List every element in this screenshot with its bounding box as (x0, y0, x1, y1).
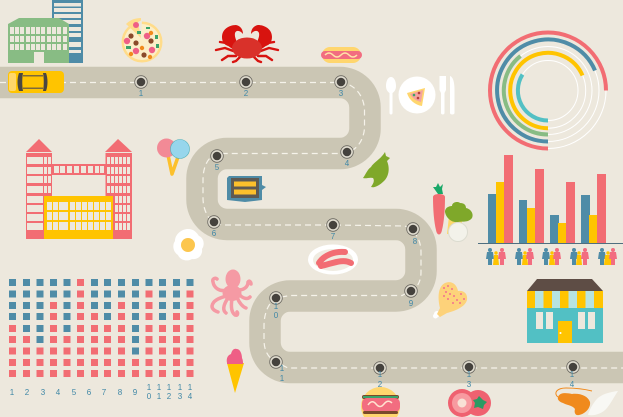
icon: burger (361, 387, 400, 417)
route stop numbers (139, 89, 575, 389)
icon: sausage plate (308, 244, 358, 274)
radial bar chart (490, 32, 606, 148)
icon: octopus (212, 270, 251, 315)
icon: pizza (122, 18, 162, 62)
icon: toaster (227, 176, 266, 202)
waffle chart: column numbers: 0 (147, 392, 152, 401)
route stop numbers: 1 (570, 370, 575, 379)
icon: pea pod (363, 152, 390, 187)
waffle chart: column numbers: 1 (147, 383, 152, 392)
route stop numbers: 9 (409, 299, 414, 308)
route stop numbers: 1 (274, 302, 279, 311)
icon: blue tower (52, 0, 83, 63)
waffle chart: column numbers: 1 (157, 383, 162, 392)
route stop numbers: 4 (345, 159, 350, 168)
icon: shop front (527, 279, 603, 343)
waffle chart: column numbers: 3 (41, 388, 46, 397)
waffle chart: column numbers: 4 (56, 388, 61, 397)
icon: vegetables group (445, 202, 473, 242)
road (0, 82, 623, 368)
icon: green building (8, 18, 69, 63)
waffle chart: column numbers: 2 (167, 392, 172, 401)
route stop numbers: 3 (467, 380, 472, 389)
waffle chart: column numbers: 8 (118, 388, 123, 397)
icon: red crab (216, 25, 278, 62)
icon: hot dog (321, 47, 362, 63)
waffle chart: column numbers: 7 (102, 388, 107, 397)
route stop numbers: 4 (570, 380, 575, 389)
waffle chart: column numbers: 3 (178, 392, 183, 401)
route stop numbers: 1 (280, 364, 285, 373)
route stop numbers: 0 (274, 311, 279, 320)
route stop numbers: 1 (139, 89, 144, 98)
icon row: families (486, 248, 617, 265)
route stop numbers: 2 (244, 89, 249, 98)
waffle chart: column numbers: 1 (167, 383, 172, 392)
waffle chart: column numbers: 9 (133, 388, 138, 397)
waffle chart: column numbers: 5 (72, 388, 77, 397)
route stop numbers: 1 (378, 370, 383, 379)
icon: seashell (588, 391, 618, 415)
route stop numbers: 3 (339, 89, 344, 98)
waffle chart: column numbers: 1 (10, 388, 15, 397)
icon: ice cream cone (227, 349, 244, 393)
icon: carrot (433, 183, 445, 234)
icon: fried egg (173, 229, 204, 260)
waffle chart: column numbers: 2 (25, 388, 30, 397)
route stop numbers: 5 (215, 163, 220, 172)
route stop numbers: 7 (331, 232, 336, 241)
bar chart (478, 155, 623, 244)
icon: chicken drumstick (433, 282, 467, 318)
icon: yellow taxi (8, 71, 64, 93)
waffle chart: column numbers: 4 (188, 392, 193, 401)
waffle chart: column numbers: 6 (87, 388, 92, 397)
waffle chart: column numbers (10, 383, 193, 401)
icon: tomato slices (448, 389, 491, 417)
waffle chart: column numbers: 1 (188, 383, 193, 392)
waffle chart: column numbers: 1 (157, 392, 162, 401)
route stop numbers: 8 (413, 237, 418, 246)
route stop numbers: 1 (280, 374, 285, 383)
icon: pink twin-tower building (26, 139, 132, 239)
route stop numbers: 6 (212, 229, 217, 238)
route stop numbers: 1 (467, 370, 472, 379)
route stop markers (135, 76, 579, 374)
waffle chart: squares (9, 279, 194, 377)
route stop numbers: 2 (378, 380, 383, 389)
waffle chart: column numbers: 1 (178, 383, 183, 392)
icon: plate with pizza and cutlery (386, 76, 454, 114)
icon: shrimp (556, 388, 592, 415)
icon: ice cream double scoop (157, 138, 190, 174)
